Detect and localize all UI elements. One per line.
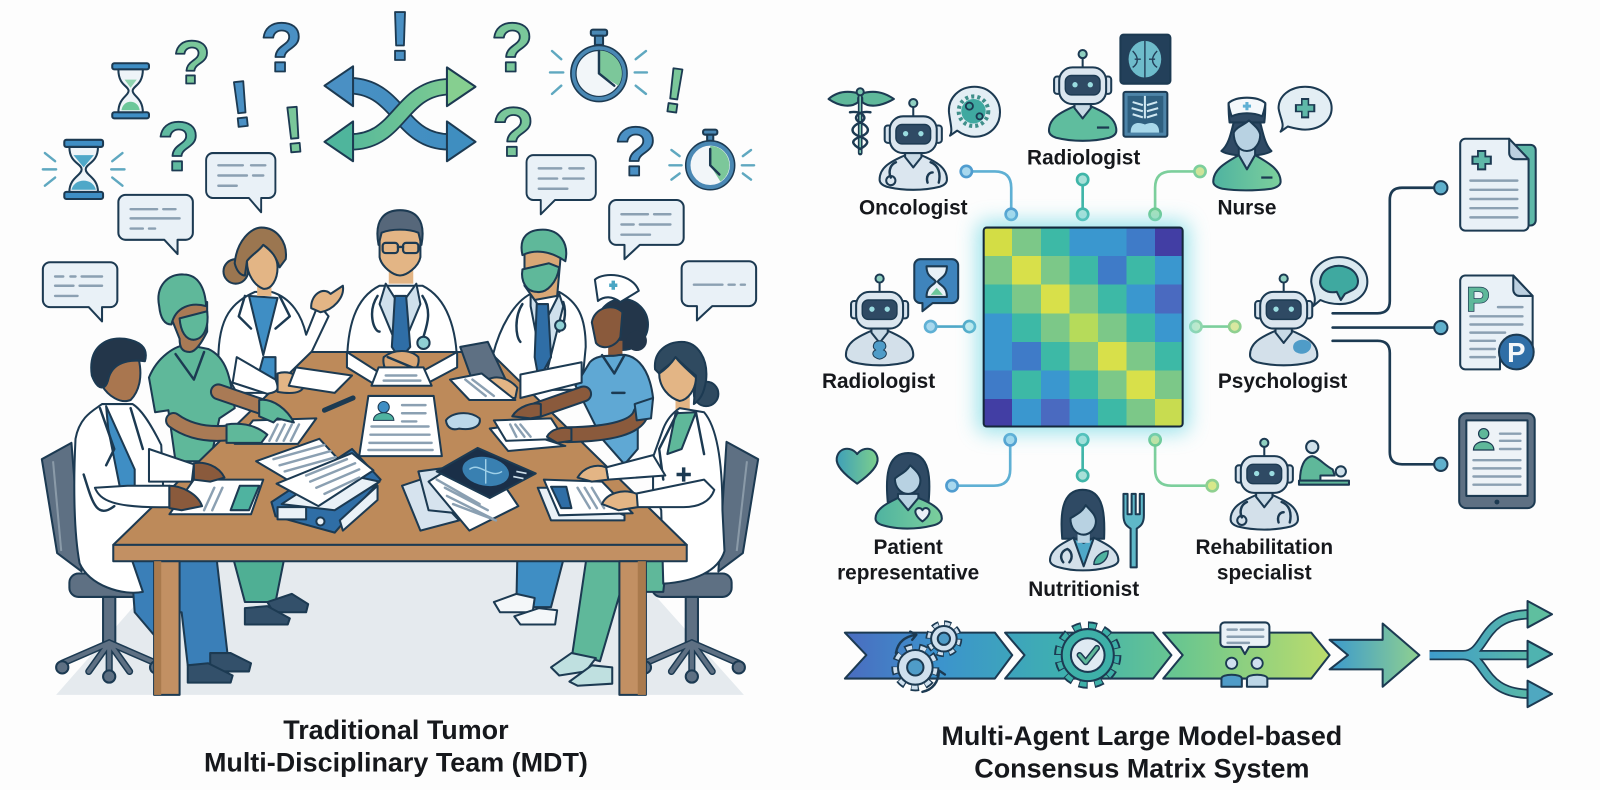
icon: question mark: ?	[491, 8, 533, 86]
legs: nurse	[494, 556, 564, 624]
speech bubble	[682, 261, 756, 320]
connectors to matrix	[925, 166, 1240, 491]
agent: psychologist	[1218, 257, 1367, 393]
consensus matrix heatmap	[978, 221, 1189, 433]
speech bubble	[609, 200, 684, 259]
arms: surgeon	[173, 392, 294, 443]
agent: nurse	[1213, 87, 1332, 219]
paper: nurse	[490, 418, 565, 451]
chair: left	[42, 443, 162, 683]
process chevron 1	[845, 633, 1012, 679]
process chevron 2	[1005, 633, 1171, 679]
speech bubble	[206, 153, 275, 212]
binder stack	[271, 449, 381, 533]
agent: nutritionist	[1028, 490, 1144, 601]
panel: consensus matrix system	[822, 35, 1552, 707]
icon: rotating gears	[895, 624, 959, 692]
icon: branching output arrows	[1430, 601, 1552, 707]
icon: question mark: ?	[615, 113, 657, 191]
arms: man in coat	[95, 449, 224, 510]
label: radiologist: Radiologist	[1027, 146, 1140, 169]
agent: oncologist	[829, 87, 1000, 219]
icon: question mark: ?	[157, 107, 200, 185]
output: clinical document	[1460, 139, 1536, 231]
person: lead doctor with glasses	[347, 210, 457, 367]
arms: lead doctor	[347, 351, 457, 384]
icon: question mark: ?	[260, 8, 303, 86]
icon: gear with check	[1059, 626, 1117, 684]
agent: radiologist top	[1027, 35, 1170, 169]
icon: brain bubble	[1311, 257, 1367, 306]
label: oncologist: Oncologist	[859, 196, 968, 219]
document: patient record	[359, 396, 442, 456]
paper: tablet side	[450, 373, 515, 400]
label: rehabilitation specialist: Rehabilitation	[1196, 536, 1333, 559]
tablet held by doctor	[460, 342, 582, 398]
person: woman doctor with raised hand	[218, 228, 343, 393]
papers under xray	[402, 449, 518, 531]
label: rehabilitation specialist: specialist	[1217, 562, 1312, 585]
chair: right	[639, 442, 758, 683]
title: consensus matrix system: Multi-Agent Large Model-based	[941, 721, 1342, 751]
process arrow 4	[1330, 623, 1419, 687]
output: plan document: P	[1507, 337, 1526, 368]
agent: radiologist left	[822, 259, 958, 393]
icon: shuffle crossing arrows	[324, 66, 476, 161]
icon: chest xray	[1123, 92, 1167, 137]
icon: hourglass with rays	[43, 140, 124, 199]
icon: small hourglass	[112, 63, 149, 118]
output: tablet record	[1459, 413, 1535, 508]
legs: man in coat	[131, 556, 251, 683]
output connectors	[1333, 181, 1447, 471]
paper: surgeon	[235, 418, 316, 444]
icon: exclamation: !	[226, 67, 256, 141]
panel: traditional MDT illustration	[42, 0, 758, 695]
icon: brain scan	[1120, 35, 1170, 84]
speech bubble	[527, 155, 596, 214]
icon: cell speech bubble	[949, 87, 1000, 137]
document: centre top	[371, 367, 432, 386]
output: plan document	[1460, 276, 1534, 369]
icon: discussion group	[1220, 622, 1269, 687]
crumpled note	[446, 413, 480, 429]
label: nutritionist: Nutritionist	[1028, 578, 1139, 601]
icon: heart	[837, 449, 878, 484]
title: traditional MDT: Multi-Disciplinary Team (MDT)	[204, 747, 588, 777]
paper: woman right stack	[538, 480, 633, 520]
person: man in coat	[74, 339, 163, 593]
icon: plus speech bubble	[1279, 87, 1332, 132]
label: nurse: Nurse	[1217, 196, 1276, 219]
speech bubble	[43, 262, 117, 321]
agent: rehabilitation specialist	[1196, 439, 1349, 585]
title: traditional MDT: Traditional Tumor	[283, 715, 509, 745]
icon: large stopwatch	[550, 30, 647, 102]
icon: exclamation: !	[660, 55, 690, 127]
table	[113, 352, 687, 695]
label: patient representative: representative	[837, 562, 979, 585]
arm: woman doctor	[233, 357, 304, 394]
arms: woman right	[578, 455, 714, 510]
icon: rehab therapy	[1299, 441, 1349, 485]
person: woman right	[653, 342, 724, 584]
icon: question mark: ?	[173, 29, 211, 97]
icon: hourglass bubble	[914, 259, 958, 311]
paper: tilted loose	[256, 439, 345, 481]
label: psychologist: Psychologist	[1218, 370, 1347, 393]
label: patient representative: Patient	[873, 536, 943, 559]
legs: surgeon	[233, 556, 308, 624]
speech bubble	[118, 195, 193, 254]
icon: question mark: ?	[492, 93, 534, 171]
person: surgeon left	[149, 274, 235, 461]
icon: caduceus	[829, 88, 894, 153]
person: masked doctor right	[493, 230, 586, 390]
person: nurse	[576, 275, 653, 464]
pen	[324, 398, 353, 410]
arms: nurse	[512, 394, 653, 443]
paper: man in coat	[169, 480, 263, 514]
process chevron 3	[1163, 633, 1330, 679]
floor	[56, 561, 744, 695]
icon: small stopwatch	[669, 130, 754, 190]
label: radiologist left: Radiologist	[822, 370, 935, 393]
output: plan document: P	[1466, 281, 1489, 319]
paper: woman doctor	[289, 367, 352, 393]
icon: exclamation: !	[280, 92, 308, 167]
title: consensus matrix system: Consensus Matrix System	[974, 754, 1309, 784]
icon: fork	[1123, 494, 1144, 567]
agent: patient representative	[837, 449, 979, 585]
legs: woman right	[551, 556, 667, 686]
xray film	[437, 448, 536, 498]
